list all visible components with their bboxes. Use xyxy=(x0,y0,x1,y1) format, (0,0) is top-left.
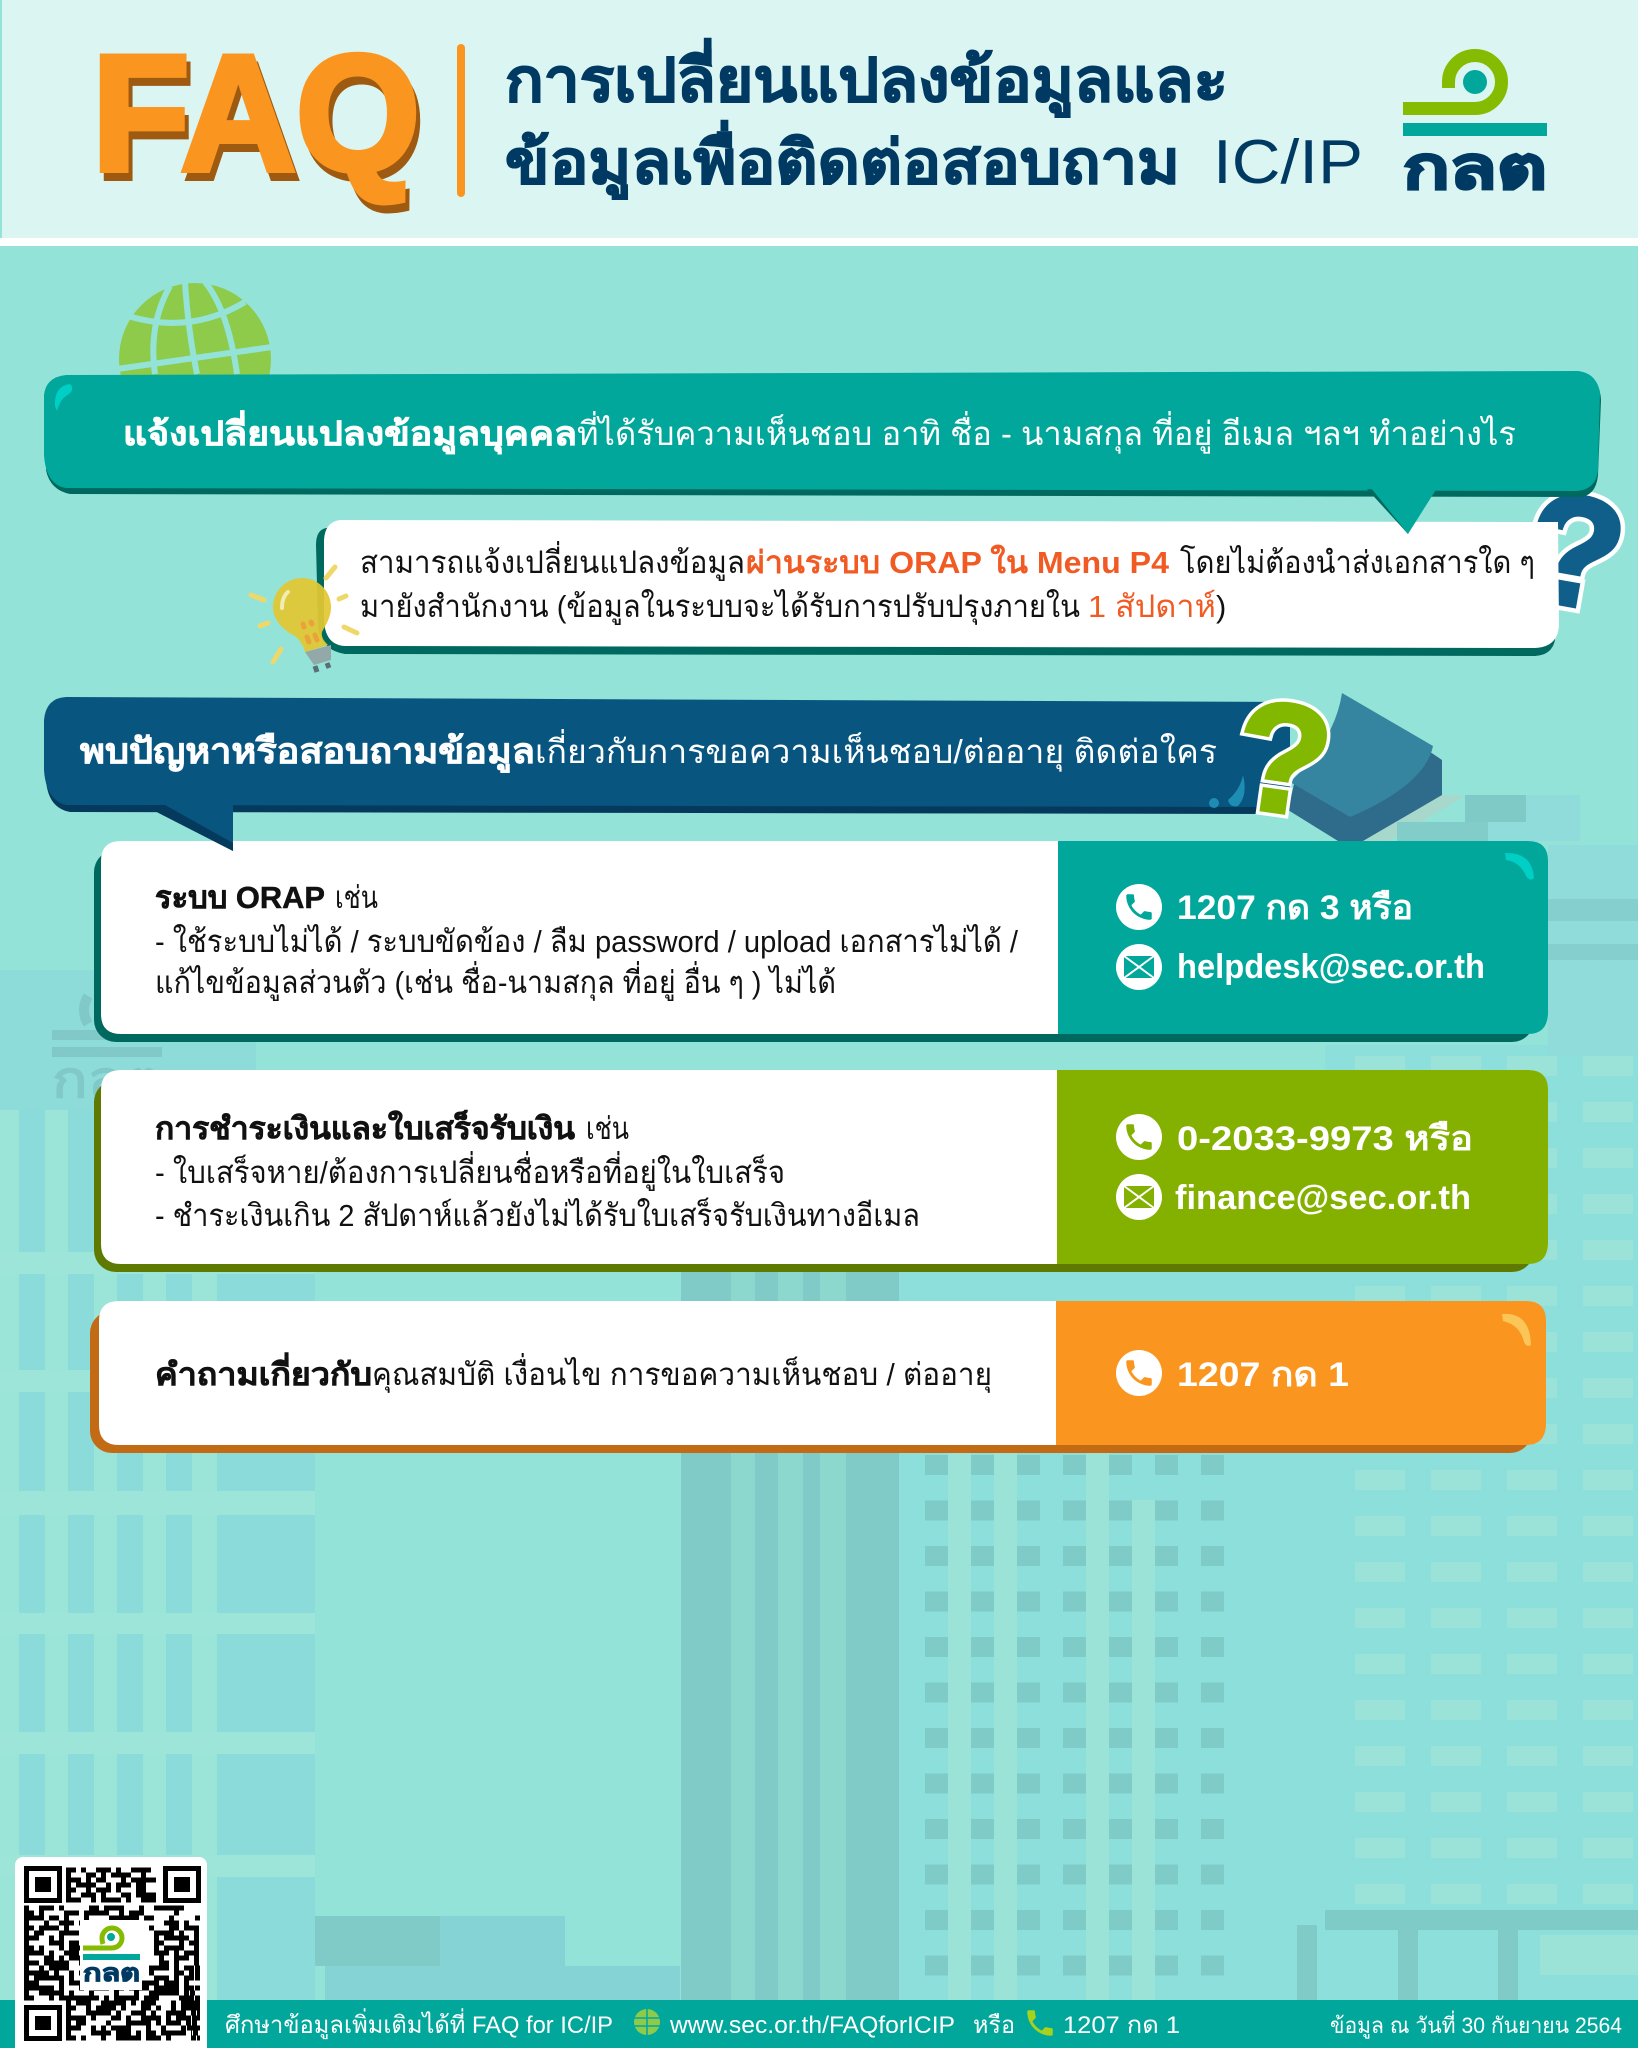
question heading xyxy=(80,729,1217,773)
panel text: คุณสมบัติ เงื่อนไข การขอความเห็นชอบ / ต่ออายุ xyxy=(372,1353,992,1394)
bubble 2 tail xyxy=(143,805,233,851)
logo: SEC xyxy=(1403,56,1547,201)
answer text: ผ่านระบบ ORAP ใน Menu P4 xyxy=(746,544,1170,580)
decorative drops xyxy=(1228,775,1245,806)
QR centre logo xyxy=(80,1920,142,1990)
icon: green question mark: ? xyxy=(1224,666,1342,851)
answer text: ) xyxy=(1216,589,1226,624)
icon: phone xyxy=(1027,2010,1053,2036)
footer text: ศึกษาข้อมูลเพิ่มเติมได้ที่ FAQ for IC/IP xyxy=(225,2008,613,2040)
panel text: เช่น xyxy=(335,880,378,915)
icon: light bulb xyxy=(251,567,357,672)
title text: ข้อมูลเพื่อติดต่อสอบถาม xyxy=(505,120,1180,200)
question heading: ที่ได้รับความเห็นชอบ อาทิ ชื่อ - นามสกุล ที่อยู่ อีเมล ฯลฯ ทำอย่างไร xyxy=(577,411,1516,454)
website: www.sec.or.th/FAQforICIP xyxy=(669,2012,955,2039)
speech bubble: question 2 xyxy=(44,697,1290,814)
footer bar xyxy=(0,2000,1638,2048)
phone contact: 0-2033-9973 หรือ xyxy=(1177,1120,1473,1158)
phone contact xyxy=(1116,884,1413,930)
panel: payment and receipts xyxy=(94,1070,1548,1272)
answer text: มายังสำนักงาน (ข้อมูลในระบบจะได้รับการปรับปรุงภายใน xyxy=(360,589,1080,626)
title text: IC/IP xyxy=(1213,128,1363,197)
panel text: - ใช้ระบบไม่ได้ / ระบบขัดข้อง / ลืม password / upload เอกสารไม่ได้ / xyxy=(155,924,1018,959)
email contact: helpdesk@sec.or.th xyxy=(1177,948,1485,986)
panel text xyxy=(155,880,1018,1002)
or: หรือ xyxy=(973,2012,1015,2039)
highlight xyxy=(1505,853,1534,880)
panel text: แก้ไขข้อมูลส่วนตัว (เช่น ชื่อ-นามสกุล ที่อยู่ อื่น ๆ ) ไม่ได้ xyxy=(155,961,836,1002)
phone contact: 1207 กด 1 xyxy=(1177,1356,1349,1394)
QR finder patterns xyxy=(26,1868,198,2038)
title: FAQ: FAQ xyxy=(92,21,420,205)
title divider xyxy=(457,44,465,197)
icon: globe xyxy=(117,282,272,435)
highlight xyxy=(55,384,72,411)
phone number: 1207 กด 1 xyxy=(1063,2012,1180,2039)
panel text: ระบบ ORAP xyxy=(155,880,325,915)
QR centre logo: กลต xyxy=(83,1960,140,1987)
panel: ORAP system xyxy=(94,841,1548,1042)
background: city buildings: กลต xyxy=(52,1052,162,1108)
answer text xyxy=(360,541,1535,626)
question heading: พบปัญหาหรือสอบถามข้อมูล xyxy=(80,732,535,773)
logo: SEC: กลต xyxy=(1403,136,1547,201)
panel text: เช่น xyxy=(586,1111,629,1146)
icon: navy question mark: ? xyxy=(1514,458,1637,645)
email contact: finance@sec.or.th xyxy=(1175,1179,1471,1217)
panel: qualifications questions xyxy=(90,1301,1546,1453)
answer text: 1 สัปดาห์ xyxy=(1088,589,1216,624)
title: FAQ: FAQ xyxy=(96,29,424,213)
panel text xyxy=(155,1352,992,1394)
answer box xyxy=(316,520,1559,656)
answer text: โดยไม่ต้องนำส่งเอกสารใด ๆ xyxy=(1180,545,1535,580)
data date: ข้อมูล ณ วันที่ 30 กันยายน 2564 xyxy=(1330,2010,1622,2039)
question heading xyxy=(123,410,1516,455)
panel text: - ชำระเงินเกิน 2 สัปดาห์แล้วยังไม่ได้รับใบเสร็จรับเงินทางอีเมล xyxy=(155,1197,920,1233)
email contact xyxy=(1116,944,1485,990)
QR code xyxy=(15,1857,207,2048)
question heading: เกี่ยวกับการขอความเห็นชอบ/ต่ออายุ ติดต่อใคร xyxy=(535,729,1217,772)
phone contact xyxy=(1116,1114,1473,1160)
icon: green question mark: ? xyxy=(1224,666,1342,851)
phone contact xyxy=(1116,1350,1349,1396)
panel text: คำถามเกี่ยวกับ xyxy=(155,1352,372,1392)
answer text: สามารถแจ้งเปลี่ยนแปลงข้อมูล xyxy=(360,541,745,581)
email contact xyxy=(1116,1174,1471,1220)
icon: navy question mark: ? xyxy=(1514,458,1637,645)
icon: globe xyxy=(634,2009,660,2035)
phone contact: 1207 กด 3 หรือ xyxy=(1177,889,1413,927)
panel text: การชำระเงินและใบเสร็จรับเงิน xyxy=(155,1109,575,1146)
title text xyxy=(505,38,1363,200)
background: city buildings xyxy=(0,795,1638,2000)
title text: การเปลี่ยนแปลงข้อมูลและ xyxy=(505,38,1228,118)
panel text xyxy=(155,1109,920,1233)
panel text: - ใบเสร็จหาย/ต้องการเปลี่ยนชื่อหรือที่อยู่ในใบเสร็จ xyxy=(155,1151,785,1191)
question heading: แจ้งเปลี่ยนแปลงข้อมูลบุคคล xyxy=(123,410,577,455)
highlight xyxy=(1502,1314,1531,1346)
header band xyxy=(0,0,1638,246)
icon: open book xyxy=(1288,693,1442,841)
speech bubble: question 1 xyxy=(44,371,1601,497)
bubble 1 tail xyxy=(1367,488,1437,534)
